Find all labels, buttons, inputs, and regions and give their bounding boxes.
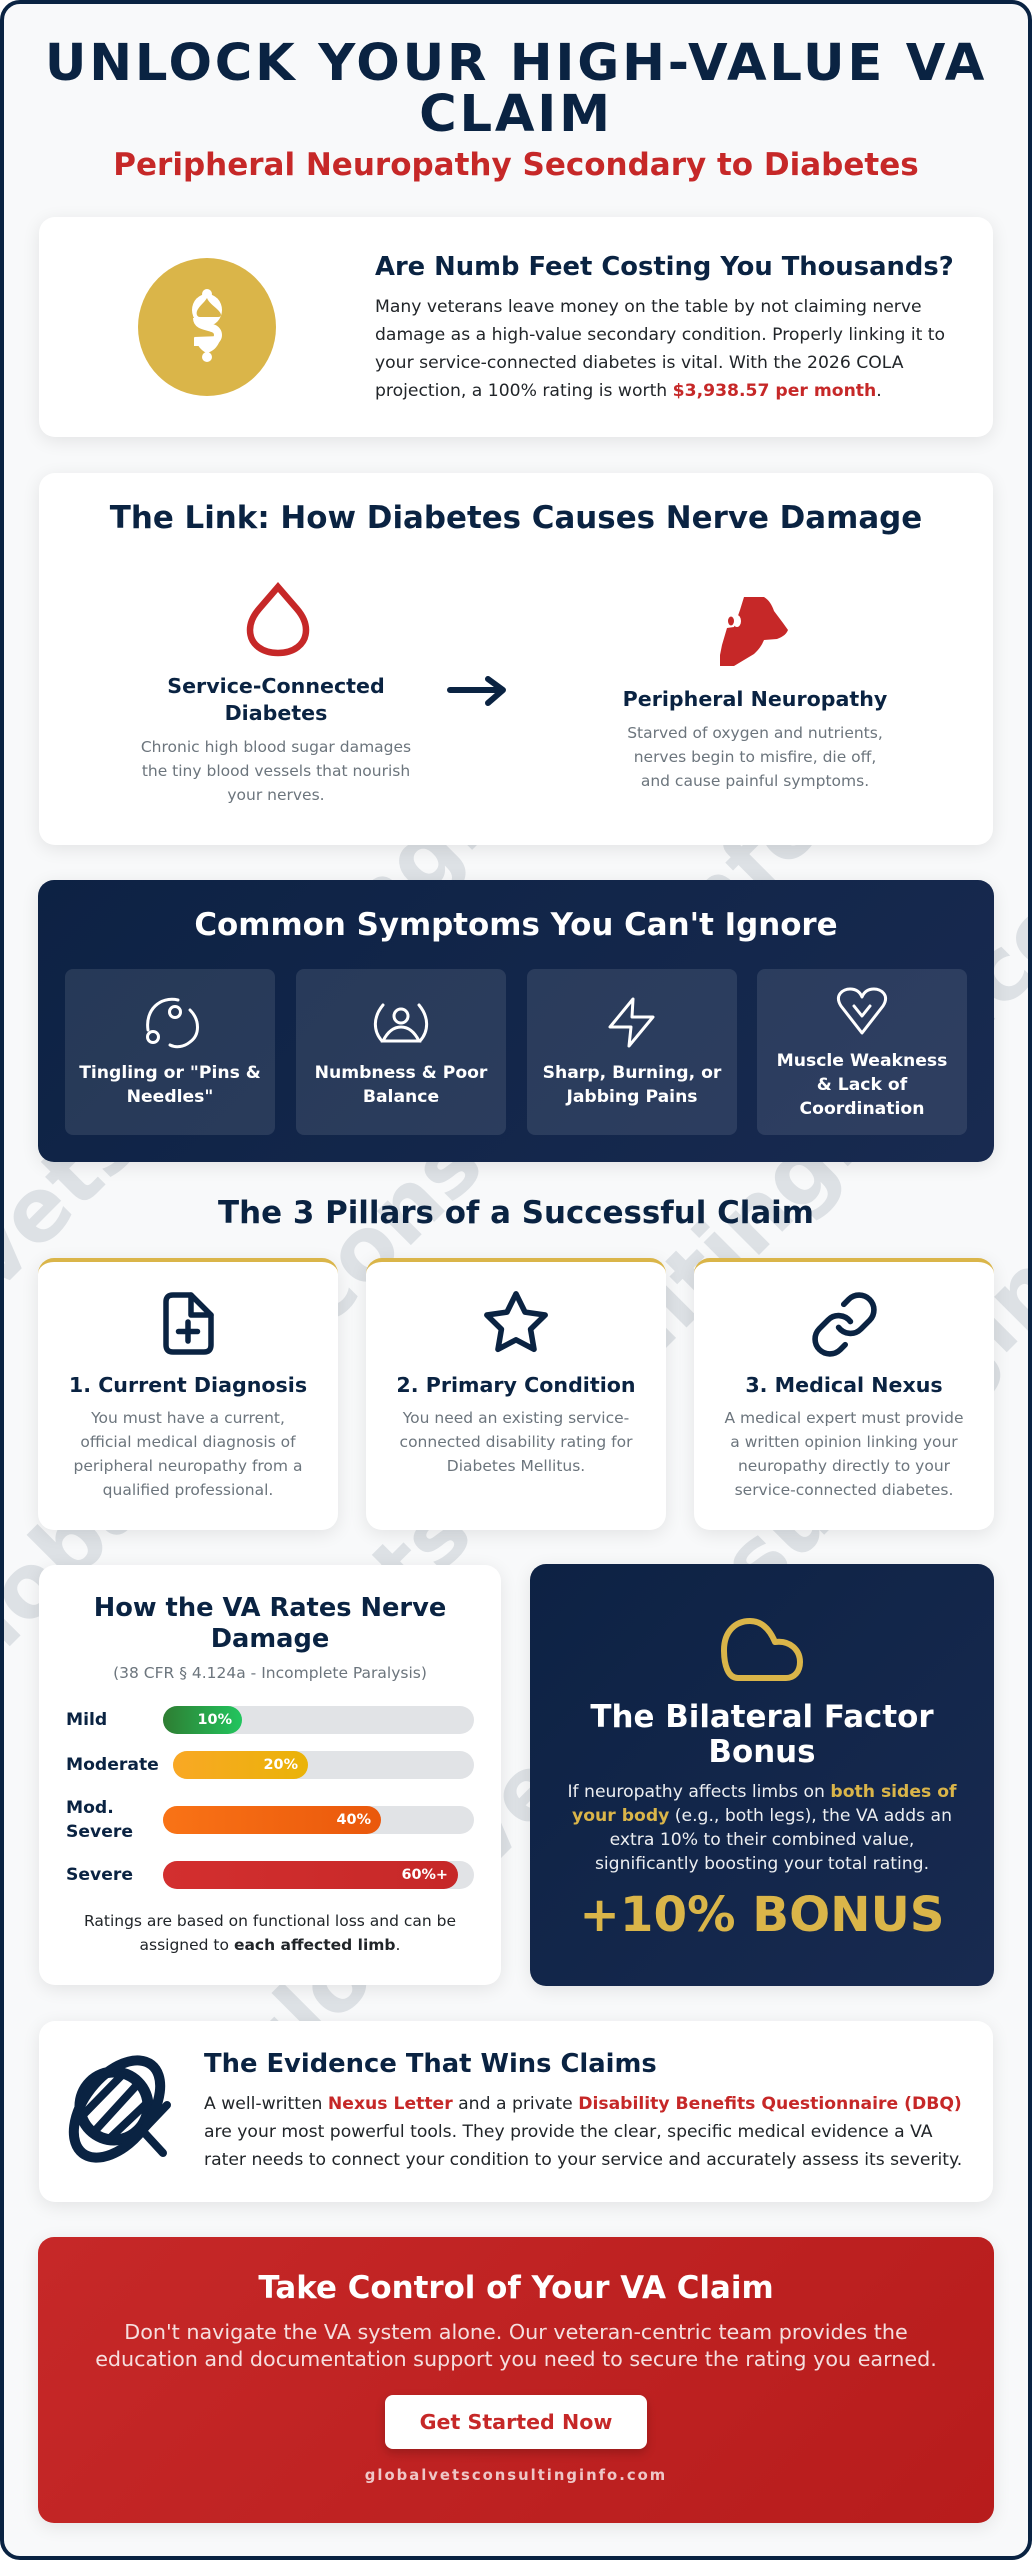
label: weakness: & Lack of bbox=[817, 1075, 907, 1095]
title bbox=[45, 32, 987, 144]
text: intro: damage as a high-value secondary condition. Properly linking it to bbox=[375, 325, 945, 345]
symptom card: tingling bbox=[65, 969, 275, 1135]
text: diabetes: Chronic high blood sugar damages bbox=[141, 738, 411, 756]
heading: intro: Are Numb Feet Costing You Thousands? bbox=[375, 252, 954, 282]
label: severe: Severe bbox=[66, 1865, 133, 1885]
label: tingling: Needles" bbox=[127, 1087, 213, 1107]
icon: star bbox=[484, 1291, 548, 1352]
text: pillar 3 bbox=[724, 1409, 963, 1499]
symptom card: numbness bbox=[296, 969, 506, 1135]
panel: symptoms bbox=[38, 880, 994, 1162]
label: numbness bbox=[315, 1063, 488, 1107]
icon: heart bbox=[836, 988, 888, 1035]
text: call to action: Don't navigate the VA system alone. Our veteran-centric team provides the bbox=[124, 2320, 908, 2344]
text: neuropathy: nerves begin to misfire, die off, bbox=[634, 748, 876, 766]
text: bilateral factor bbox=[567, 1782, 957, 1874]
label: moderately severe: Mod. bbox=[66, 1798, 114, 1818]
bar: moderately severe 40%: 40% bbox=[337, 1812, 371, 1828]
heading: bilateral factor: Bonus bbox=[708, 1734, 816, 1770]
panel: bilateral factor bbox=[530, 1564, 994, 1986]
text: pillar 2: You need an existing service- bbox=[403, 1409, 629, 1427]
website link: globalvetsconsultinginfo.com bbox=[365, 2467, 667, 2484]
heading: bilateral factor: The Bilateral Factor bbox=[590, 1699, 934, 1735]
icon: dollar coin bbox=[138, 258, 276, 396]
text: call to action bbox=[95, 2320, 937, 2371]
text: pillar 3: neuropathy directly to your bbox=[738, 1457, 950, 1475]
text: intro: Many veterans leave money on the table by not claiming nerve bbox=[375, 297, 922, 317]
panel: intro bbox=[39, 217, 993, 437]
label: moderately severe: Severe bbox=[66, 1822, 133, 1842]
panel: evidence bbox=[39, 2021, 993, 2202]
text: rating note: Ratings are based on functional loss and can be bbox=[84, 1912, 456, 1930]
panel: VA ratings bbox=[39, 1565, 501, 1985]
label: tingling bbox=[79, 1063, 261, 1107]
heading: VA ratings: Damage bbox=[211, 1624, 329, 1654]
text: bilateral factor: significantly boosting your total rating. bbox=[595, 1854, 929, 1874]
text: neuropathy bbox=[627, 724, 883, 790]
bar: moderate 20% bbox=[173, 1751, 474, 1779]
text: neuropathy: Starved of oxygen and nutrients, bbox=[627, 724, 883, 742]
heading: pillar 2: 2. Primary Condition bbox=[396, 1373, 636, 1397]
text: pillar 2: connected disability rating for bbox=[400, 1433, 632, 1451]
title: CLAIM bbox=[419, 84, 613, 144]
title: UNLOCK YOUR HIGH-VALUE VA bbox=[45, 32, 987, 92]
bar: moderate 20%: 20% bbox=[264, 1757, 298, 1773]
label: diabetes: Service-Connected bbox=[167, 674, 385, 698]
text: pillar 1: qualified professional. bbox=[103, 1481, 273, 1499]
icon: nerve bbox=[720, 597, 788, 666]
text: pillar 3: a written opinion linking your bbox=[730, 1433, 958, 1451]
panel: the link bbox=[39, 473, 993, 845]
text: pillar 3: A medical expert must provide bbox=[725, 1409, 963, 1427]
subtitle: Peripheral Neuropathy Secondary to Diabetes bbox=[113, 147, 919, 183]
text: pillar 1: peripheral neuropathy from a bbox=[74, 1457, 302, 1475]
button: get started bbox=[385, 2395, 647, 2449]
label: moderate: Moderate bbox=[66, 1755, 159, 1775]
label: moderately severe bbox=[66, 1798, 133, 1842]
text: evidence bbox=[204, 2094, 962, 2170]
button: get started: Get Started Now bbox=[420, 2410, 612, 2434]
heading: the link: The Link: How Diabetes Causes Nerve Damage bbox=[110, 500, 922, 536]
text: bilateral factor: extra 10% to their combined value, bbox=[610, 1830, 914, 1850]
callout: bonus: +10% BONUS bbox=[579, 1887, 945, 1943]
text: bilateral factor: your body (e.g., both legs), the VA adds an bbox=[572, 1806, 952, 1826]
heading: VA ratings: How the VA Rates Nerve bbox=[94, 1593, 446, 1623]
heading: symptoms: Common Symptoms You Can't Ignore bbox=[194, 907, 838, 943]
text: pillar 3: service-connected diabetes. bbox=[735, 1481, 953, 1499]
bar: mild 10%: 10% bbox=[198, 1712, 232, 1728]
label: weakness: Muscle Weakness bbox=[777, 1051, 947, 1071]
label: sharp pain: Sharp, Burning, or bbox=[543, 1063, 721, 1083]
text: evidence: A well-written Nexus Letter and a private Disability Benefits Questionnaire (DBQ) bbox=[204, 2094, 962, 2114]
text: pillar 1 bbox=[74, 1409, 302, 1499]
text: rating note bbox=[84, 1912, 456, 1954]
panel: call to action bbox=[38, 2237, 994, 2523]
label: neuropathy: Peripheral Neuropathy bbox=[623, 687, 887, 711]
background watermark: nginfo.com bbox=[320, 494, 785, 959]
text: diabetes bbox=[141, 738, 411, 804]
heading: pillar 3: 3. Medical Nexus bbox=[745, 1373, 943, 1397]
text: pillar 2 bbox=[400, 1409, 632, 1475]
heading: evidence: The Evidence That Wins Claims bbox=[204, 2049, 657, 2079]
bar: mild 10% bbox=[163, 1706, 474, 1734]
symptom card: sharp pain bbox=[527, 969, 737, 1135]
pillar card 3 bbox=[694, 1258, 994, 1530]
text: pillar 2: Diabetes Mellitus. bbox=[447, 1457, 585, 1475]
symptom card: weakness bbox=[757, 969, 967, 1135]
label: weakness: Coordination bbox=[800, 1099, 924, 1119]
text: diabetes: your nerves. bbox=[227, 786, 325, 804]
label: weakness bbox=[777, 1051, 947, 1119]
heading: pillars: The 3 Pillars of a Successful Claim bbox=[218, 1195, 814, 1231]
label: diabetes: Diabetes bbox=[225, 701, 327, 725]
text: pillar 1: official medical diagnosis of bbox=[80, 1433, 296, 1451]
text: pillar 1: You must have a current, bbox=[91, 1409, 285, 1427]
text: diabetes: the tiny blood vessels that nourish bbox=[142, 762, 410, 780]
label: tingling: Tingling or "Pins & bbox=[79, 1063, 261, 1083]
icon: chain link bbox=[812, 1292, 877, 1357]
heading: call to action: Take Control of Your VA Claim bbox=[258, 2270, 774, 2306]
text: intro bbox=[375, 297, 945, 401]
icon: tingling bbox=[146, 998, 199, 1048]
label: sharp pain: Jabbing Pains bbox=[566, 1087, 698, 1107]
label: numbness: Balance bbox=[363, 1087, 439, 1107]
text: neuropathy: and cause painful symptoms. bbox=[641, 772, 869, 790]
pillar card 1 bbox=[38, 1258, 338, 1530]
label: numbness: Numbness & Poor bbox=[315, 1063, 487, 1083]
heading: pillar 1: 1. Current Diagnosis bbox=[69, 1373, 307, 1397]
arrow bbox=[447, 676, 506, 706]
text: rating reference: (38 CFR § 4.124a - Incomplete Paralysis) bbox=[113, 1664, 427, 1682]
text: rating note: assigned to each affected limb. bbox=[140, 1936, 400, 1954]
text: bilateral factor: If neuropathy affects limbs on both sides of bbox=[567, 1782, 957, 1802]
icon: medical document bbox=[163, 1292, 214, 1355]
bar: moderately severe 40% bbox=[163, 1806, 474, 1834]
icon: blood drop bbox=[246, 582, 310, 656]
bar: severe 60%+: 60%+ bbox=[401, 1867, 448, 1883]
label: diabetes bbox=[167, 674, 385, 725]
heading: VA ratings bbox=[94, 1593, 446, 1654]
text: evidence: rater needs to connect your condition to your service and accurately assess its severity. bbox=[204, 2150, 962, 2170]
text: evidence: are your most powerful tools. They provide the clear, specific medical evidence a VA bbox=[204, 2122, 933, 2142]
text: intro: projection, a 100% rating is worth $3,938.57 per month. bbox=[375, 381, 882, 401]
label: sharp pain bbox=[543, 1063, 722, 1107]
icon: numbness bbox=[374, 1003, 428, 1043]
text: call to action: education and documentation support you need to secure the rating you earned. bbox=[95, 2347, 937, 2371]
bar: severe 60%+ bbox=[163, 1861, 474, 1889]
pillar card 2 bbox=[366, 1258, 666, 1530]
label: mild: Mild bbox=[66, 1710, 107, 1730]
heading: bilateral factor bbox=[590, 1699, 934, 1770]
icon: bolt bbox=[608, 998, 655, 1048]
icon: cloud bbox=[721, 1618, 803, 1681]
text: intro: your service-connected diabetes is vital. With the 2026 COLA bbox=[375, 353, 904, 373]
